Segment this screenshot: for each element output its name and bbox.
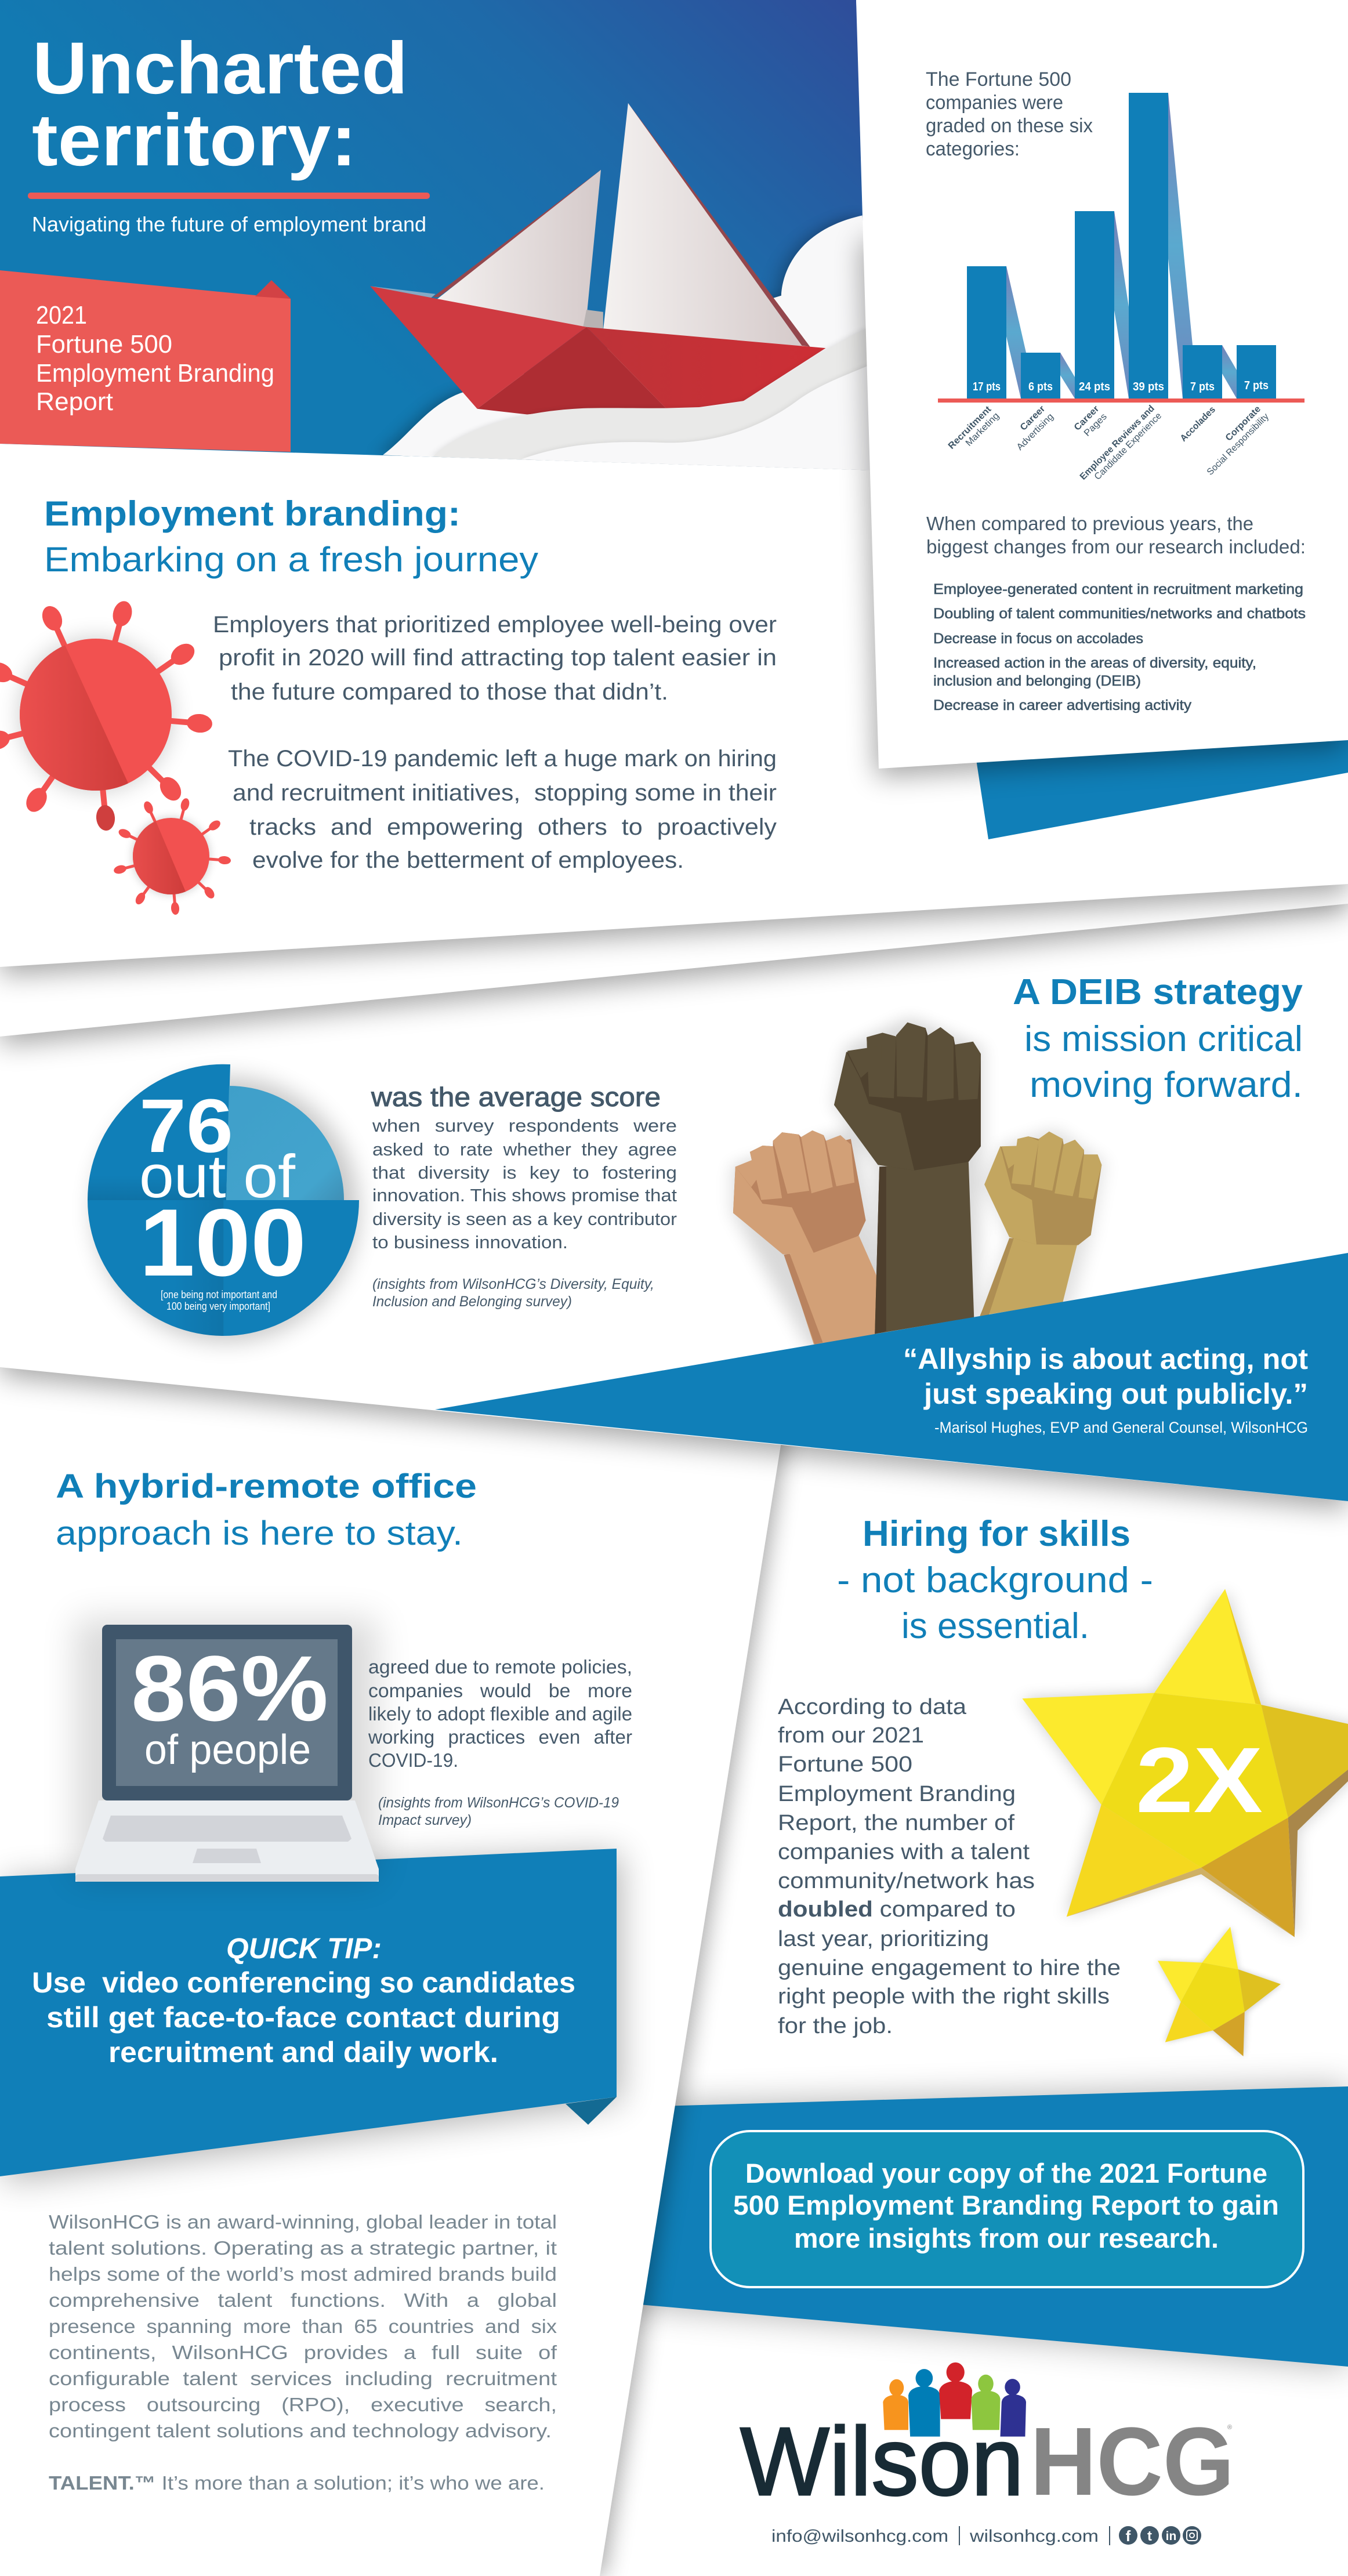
panel: quick tip: still get face-to-face contact during [46,2001,560,2034]
text: employers paragraph: Employers that prioritized employee well-being over [213,612,777,637]
text: about WilsonHCG: configurable talent services including recruitment [49,2368,557,2389]
text: about WilsonHCG [49,2211,557,2494]
title: Uncharted [32,27,408,109]
text: average score [371,1082,677,1310]
heading: hybrid-remote office [56,1468,477,1552]
light fist [733,1131,876,1345]
text: about WilsonHCG: helps some of the world’s most admired brands build [49,2263,557,2285]
contact line: info@wilsonhcg.com [771,2527,948,2546]
icon: small virus [113,798,231,915]
text: about WilsonHCG: continents, WilsonHCG provides a full suite of [49,2342,557,2363]
bar chart: category points: Pages [1082,412,1109,439]
text: remote policies: likely to adopt flexible and agile [368,1703,632,1724]
quote banner: -Marisol Hughes, EVP and General Counsel, WilsonHCG [934,1419,1308,1436]
stat: 76 out of 100 circle: 100 being very important] [166,1300,270,1312]
title [32,40,403,181]
text: about WilsonHCG: TALENT.™ It’s more than a solution; it’s who we are. [49,2472,545,2494]
bar chart: category points: 7 pts [1244,379,1269,392]
bar chart: category points: Recruitment [947,404,994,451]
social icons: f [1126,2527,1131,2545]
panel: quick tip: Use video conferencing so candidates [32,1966,575,1999]
text: according to data [778,1695,1121,2038]
text: according to data: from our 2021 [778,1723,924,1748]
text: average score: was the average score [371,1082,661,1112]
icon: large star with 2X: 2X [1136,1728,1263,1832]
panel: fortune 500 categories [856,0,1348,777]
text: employers paragraph [213,612,777,873]
text: remote policies: companies would be more [368,1680,632,1701]
illustration: paper boat on waves [370,103,888,478]
bar chart: category points: Career [1072,404,1101,433]
heading: DEIB strategy: moving forward. [1030,1065,1303,1105]
list: biggest changes: Employee-generated content in recruitment marketing [933,581,1303,597]
bar chart: category points: 6 pts [1028,381,1053,393]
bar chart: category points: Advertising [1015,412,1056,452]
text: chart intro: The Fortune 500 [926,68,1071,90]
panel: divider band [0,754,1348,1045]
social icons: in [1166,2530,1176,2543]
title: territory: [32,99,357,181]
text: average score: innovation. This shows promise that [372,1185,677,1205]
bar chart: category points: Career [1019,404,1047,433]
dark fist [834,1023,981,1334]
text: according to data: genuine engagement to hire the [778,1956,1121,1980]
text: according to data: According to data [778,1695,967,1719]
logo people [883,2363,1026,2437]
text: about WilsonHCG: talent solutions. Operating as a strategic partner, it [49,2237,557,2259]
text: remote policies: Impact survey) [378,1812,472,1828]
panel: quick tip [0,1849,620,2181]
text: remote policies [368,1656,632,1828]
text: according to data: last year, prioritizing [778,1927,989,1951]
heading: hybrid-remote office: A hybrid-remote office [56,1468,477,1505]
report ribbon: Fortune 500 [36,330,172,358]
bar chart: category points [938,93,1304,482]
bar chart: category points: Candidate Experience [1093,411,1164,482]
yellow fist [980,1132,1101,1317]
text: according to data: doubled compared to [778,1897,1016,1922]
text: according to data: right people with the right skills [778,1984,1110,2009]
heading: employment branding [44,494,538,579]
contact line: wilsonhcg.com [969,2527,1099,2546]
logo: WilsonHCG: ® [1227,2424,1232,2431]
panel: DEIB section background [0,904,1348,1509]
bar chart: category points: Social Responsibility [1205,412,1271,477]
bar chart: category points: Employee Reviews and [1078,404,1157,482]
heading: DEIB strategy [1013,972,1303,1105]
text: about WilsonHCG: WilsonHCG is an award-winning, global leader in total [49,2211,557,2233]
logo: WilsonHCG [740,2363,1234,2516]
illustration: raised fists [733,1017,1104,1353]
text: average score: that diversity is key to fostering [372,1162,677,1183]
list: biggest changes: inclusion and belonging (DEIB) [933,673,1141,689]
text: biggest changes intro [926,513,1306,557]
stat: 76 out of 100 circle: 76 [139,1083,233,1168]
heading: hybrid-remote office: approach is here to stay. [56,1515,463,1552]
text: employers paragraph: tracks and empowering others to proactively [249,814,777,840]
logo: WilsonHCG: HCG [1030,2408,1234,2516]
text: biggest changes intro: biggest changes from our research included: [926,536,1306,557]
icon: laptop with 86% of people [75,1618,379,1882]
list: biggest changes: Decrease in career advertising activity [933,697,1192,713]
social icons [1119,2526,1201,2545]
heading: hiring for skills: - not background - [837,1560,1153,1600]
heading: DEIB strategy: is mission critical [1024,1019,1303,1059]
bar chart: category points: Marketing [964,411,1001,448]
stat: 76 out of 100 circle: 100 [139,1189,306,1296]
stat: 76 out of 100 circle: out of [139,1143,296,1211]
text: according to data: Fortune 500 [778,1752,912,1777]
text: average score: when survey respondents were [372,1115,677,1136]
heading: hiring for skills [837,1514,1153,1646]
quote banner: “Allyship is about acting, not [903,1343,1308,1375]
subtitle: Navigating the future of employment brand [32,212,426,236]
text: average score: asked to rate whether they agree [372,1139,677,1160]
panel: download banner [580,2086,1348,2367]
button: download report: Download your copy of the 2021 Fortune [745,2158,1267,2189]
icon: laptop with 86% of people: of people [144,1727,311,1773]
bar chart: category points: Accolades [1179,405,1217,444]
text: average score: to business innovation. [372,1232,568,1252]
quote banner [435,1253,1348,1501]
icon: small star [1158,1927,1281,2056]
text: remote policies: (insights from WilsonHCG’s COVID-19 [378,1795,619,1811]
text: about WilsonHCG: comprehensive talent functions. With a global [49,2289,557,2311]
title underline [28,193,430,199]
text: biggest changes intro: When compared to previous years, the [926,513,1253,534]
heading: hiring for skills: Hiring for skills [863,1514,1130,1554]
text: chart intro [926,68,1093,160]
stat: 76 out of 100 circle: [one being not important and [161,1289,277,1300]
text: according to data: Employment Branding [778,1782,1016,1806]
report ribbon [0,270,291,452]
text: according to data: companies with a talent [778,1840,1030,1864]
social icons: t [1147,2528,1152,2544]
panel: header [0,0,893,478]
blue accent behind chart panel [974,725,1348,839]
text: about WilsonHCG: presence spanning more than 65 countries and six [49,2316,557,2337]
text: according to data: community/network has [778,1869,1035,1893]
report ribbon: Report [36,387,113,416]
text: employers paragraph: the future compared to those that didn’t. [231,679,668,705]
text: average score: Inclusion and Belonging survey) [372,1294,572,1310]
panel: hybrid-remote office background [0,1334,789,2576]
bar chart: category points: 7 pts [1190,381,1215,393]
panel: quick tip: recruitment and daily work. [108,2036,498,2068]
text: remote policies: COVID-19. [368,1749,458,1771]
heading: DEIB strategy: A DEIB strategy [1013,972,1303,1012]
text: chart intro: graded on these six [926,115,1093,137]
text: chart intro: categories: [926,138,1020,160]
bar chart: category points: 24 pts [1079,381,1110,393]
text: average score: diversity is seen as a key contributor [372,1209,677,1229]
list: biggest changes: Decrease in focus on accolades [933,631,1143,647]
icon: large virus [0,599,213,831]
report ribbon: Employment Branding [36,359,274,387]
bar chart: category points: 39 pts [1133,381,1164,393]
text: chart intro: companies were [926,92,1063,114]
icon: laptop with 86% of people: 86% [131,1636,328,1740]
heading: employment branding: Employment branding: [44,494,461,533]
bar chart: category points: 17 pts [973,381,1001,393]
stat: 76 out of 100 circle [88,1064,359,1342]
text: according to data: Report, the number of [778,1811,1014,1835]
bar chart: category points: Corporate [1224,404,1263,443]
text: employers paragraph: The COVID-19 pandemic left a huge mark on hiring [228,746,777,771]
list: biggest changes [933,581,1306,713]
text: about WilsonHCG: contingent talent solutions and technology advisory. [49,2420,552,2441]
text: remote policies: working practices even after [368,1726,632,1748]
report ribbon: 2021 [36,301,87,329]
button: download report: 500 Employment Branding Report to gain [733,2190,1279,2220]
heading: employment branding: Embarking on a fresh journey [44,540,538,579]
text: about WilsonHCG: process outsourcing (RPO), executive search, [49,2394,557,2415]
list: biggest changes: Doubling of talent communities/networks and chatbots [933,606,1306,622]
quote banner: just speaking out publicly.” [923,1378,1308,1410]
button: download report: more insights from our research. [794,2223,1219,2253]
heading: hiring for skills: is essential. [901,1606,1089,1646]
icon: large star with 2X [1022,1589,1348,1937]
contact line [771,2526,1201,2546]
logo: WilsonHCG: Wilson [740,2408,1024,2516]
text: employers paragraph: profit in 2020 will find attracting top talent easier in [219,645,777,671]
panel: quick tip: QUICK TIP: [226,1932,382,1965]
text: employers paragraph: evolve for the betterment of employees. [252,847,684,873]
list: biggest changes: Increased action in the areas of diversity, equity, [933,655,1256,671]
text: employers paragraph: and recruitment initiatives, stopping some in their [233,780,777,806]
text: according to data: for the job. [778,2014,893,2038]
text: average score: (insights from WilsonHCG’s Diversity, Equity, [372,1276,654,1292]
panel: employment branding background [0,406,1348,975]
text: remote policies: agreed due to remote policies, [368,1656,632,1678]
button: download report [711,2131,1303,2287]
